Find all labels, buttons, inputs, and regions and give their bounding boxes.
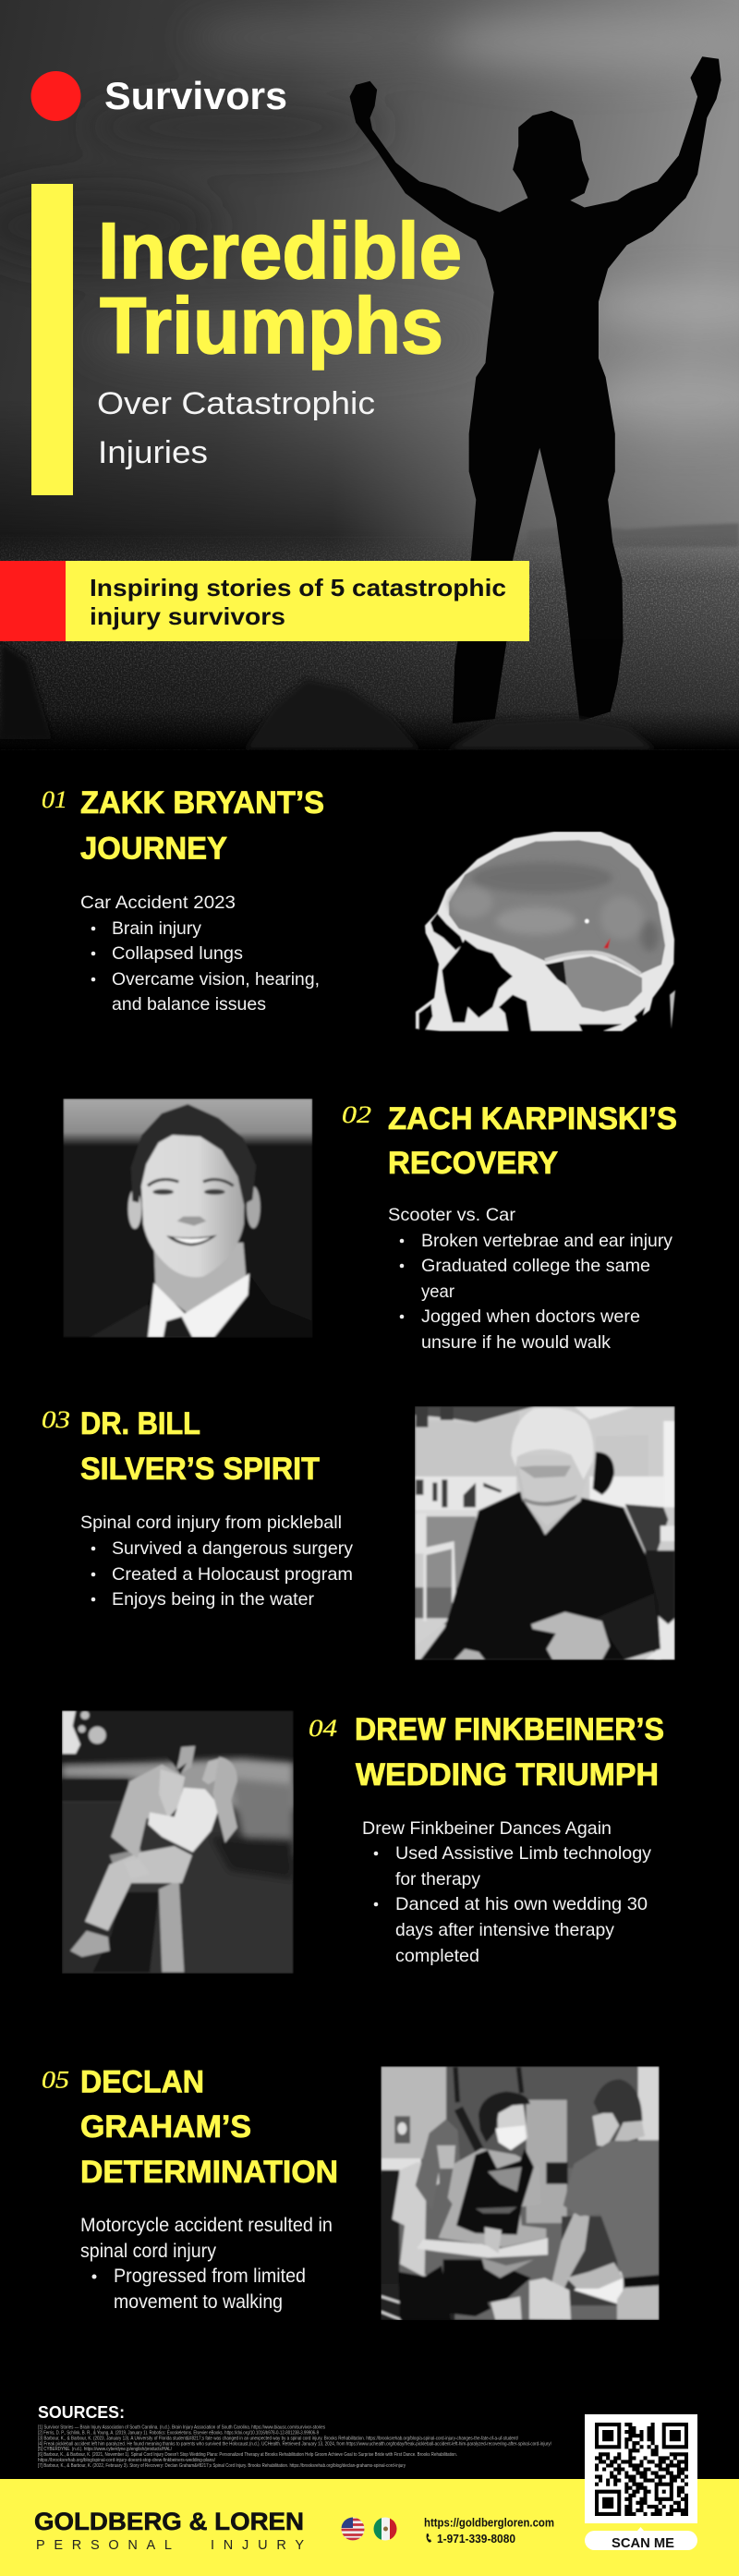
text 04: days after intensive therapy	[395, 1920, 614, 1940]
text 03	[80, 1513, 353, 1610]
intro banner	[0, 561, 529, 641]
number 01: 01	[42, 786, 67, 813]
text 05	[80, 2215, 333, 2313]
text 02: Scooter vs. Car	[388, 1205, 516, 1225]
yellow title bar	[31, 184, 73, 495]
subtitle	[97, 386, 375, 470]
story 03: Dr. Bill Silver	[42, 1406, 675, 1661]
sources: [3] Barbour, K., & Barbour, K. (2023, January 13). A University of Florida student&#8217;s fate was changed in an unexpected way by a spinal cord injury. Brooks Rehabilitation. https://brooksrehab.org/blog/a-spinal-cord-injury-changes-the-fate-of-a-uf-student/	[38, 2436, 519, 2441]
title: Incredible	[98, 207, 462, 296]
photo: walking therapy	[381, 2066, 660, 2320]
photo: man in kitchen	[415, 1406, 675, 1661]
sources: [6] Barbour, K., & Barbour, K. (2021, November 1). Spinal Cord Injury Doesn’t Stop Wedding Plans: Personalized Therapy at Brooks Rehabilitation Help Groom Achieve Goal to Surprise Bride with First Dance. Brooks Rehabilitation.	[38, 2452, 457, 2458]
photo: brain CT scan	[416, 832, 675, 1031]
scan me pill: SCAN ME	[612, 2535, 674, 2551]
footer band	[0, 2479, 739, 2576]
sources: SOURCES:	[38, 2403, 125, 2422]
text 05: Motorcycle accident resulted in	[80, 2215, 333, 2236]
heading 05: DECLAN	[80, 2064, 204, 2099]
intro banner: injury survivors	[90, 602, 285, 630]
text 02: Jogged when doctors were	[421, 1306, 640, 1327]
title: Triumphs	[100, 282, 443, 371]
text 04: completed	[395, 1946, 479, 1966]
logo: Goldberg & Loren: INJURY	[211, 2538, 304, 2553]
heading 01: JOURNEY	[80, 832, 227, 867]
hero photo: silhouette with raised arms	[0, 0, 739, 749]
heading 05: DETERMINATION	[80, 2155, 338, 2190]
text 04: for therapy	[395, 1869, 480, 1889]
text 01: and balance issues	[112, 994, 266, 1015]
heading 02: RECOVERY	[388, 1146, 558, 1181]
sources: [1] Survivor Stories — Brain Injury Association of South Carolina. (n.d.). Brain Injury Association of South Carolina. https://www.biausc.com/survivor-stories	[38, 2424, 325, 2430]
text 02: Broken vertebrae and ear injury	[421, 1231, 672, 1251]
text 05: spinal cord injury	[80, 2241, 216, 2262]
text 02: year	[421, 1282, 454, 1302]
sources: [2] Ferris, D. P., Schlink, B. R., & Young, A. (2019, January 1). Robotics: Exoskeletons. Elsevier eBooks. https://doi.org/10.1016/b978-0-12-801238-3.99906-9	[38, 2430, 319, 2436]
text 03: Created a Holocaust program	[112, 1564, 353, 1585]
text 03: Spinal cord injury from pickleball	[80, 1513, 342, 1533]
hero tag: red dot and Survivors: Survivors	[104, 74, 287, 117]
text 02: unsure if he would walk	[421, 1332, 611, 1353]
heading 01	[80, 785, 324, 867]
contact details: 1-971-339-8080	[437, 2532, 515, 2546]
sources: https://brooksrehab.org/blog/spinal-cord-injury-doesnt-stop-drew-finkbeiners-wedding-plans/	[38, 2458, 216, 2463]
logo: Goldberg & Loren	[34, 2508, 304, 2553]
photo: couple dancing	[62, 1710, 294, 1974]
text 02	[388, 1205, 672, 1353]
text 05: movement to walking	[114, 2291, 283, 2313]
sources: [5] CYBERDYNE. (n.d.). https://www.cyberdyne.jp/english/products/HAL/	[38, 2447, 173, 2452]
heading 03: DR. BILL	[80, 1406, 200, 1441]
heading 02: ZACH KARPINSKI’S	[388, 1101, 677, 1136]
text 02: Graduated college the same	[421, 1256, 650, 1276]
subtitle: Injuries	[98, 435, 208, 470]
contact details: https://goldbergloren.com	[424, 2517, 554, 2530]
number 05: 05	[42, 2066, 69, 2094]
text 04	[362, 1818, 651, 1966]
text 01: Overcame vision, hearing,	[112, 969, 320, 990]
sources: [4] Freak pickleball accident left him paralyzed. He found meaning thanks to parents who survived the Holocaust.(n.d.). UCHealth. Retrieved January 13, 2024, from https://www.uchealth.org/today/freak-pickleball-accident-left-him-paralyzed-recovering-after-spinal-cord-injury/	[38, 2441, 552, 2447]
text 01	[80, 893, 320, 1015]
number 03: 03	[42, 1406, 70, 1433]
heading 04	[355, 1712, 664, 1792]
logo: Goldberg & Loren: GOLDBERG & LOREN	[34, 2508, 304, 2535]
heading 04: WEDDING TRIUMPH	[356, 1757, 659, 1792]
story 02: Zach Karpinski	[63, 1099, 677, 1353]
story 04: Drew Finkbeiner	[62, 1710, 664, 1974]
title	[98, 207, 462, 371]
story 05: Declan Graham	[42, 2064, 660, 2320]
text 04: Danced at his own wedding 30	[395, 1894, 648, 1914]
number 04: 04	[309, 1715, 337, 1742]
text 03: Enjoys being in the water	[112, 1589, 314, 1610]
logo: Goldberg & Loren: PERSONAL	[36, 2538, 172, 2553]
heading 05	[80, 2064, 338, 2190]
photo: smiling portrait	[63, 1099, 312, 1338]
icon: US flag	[341, 2517, 365, 2541]
hero tag: red dot and Survivors	[31, 71, 287, 121]
heading 04: DREW FINKBEINER’S	[355, 1712, 664, 1747]
heading 01: ZAKK BRYANT’S	[80, 785, 324, 820]
text 01: Car Accident 2023	[80, 893, 236, 913]
scan me pill	[585, 2527, 697, 2551]
number 02: 02	[342, 1101, 371, 1128]
heading 05: GRAHAM’S	[80, 2109, 251, 2145]
sources	[38, 2403, 552, 2469]
QR code	[585, 2414, 697, 2523]
text 01: Brain injury	[112, 918, 201, 939]
text 04: Used Assistive Limb technology	[395, 1843, 651, 1864]
text 05: Progressed from limited	[114, 2266, 306, 2287]
sources: [7] Barbour, K., & Barbour, K. (2022, February 3). Story of Recovery: Declan Graham&#8217;s Spinal Cord Injury. Brooks Rehabilitation. https://brooksrehab.org/blog/declan-grahams-spinal-cord-injury	[38, 2463, 406, 2469]
heading 03: SILVER’S SPIRIT	[80, 1452, 320, 1487]
subtitle: Over Catastrophic	[97, 386, 375, 421]
intro banner: Inspiring stories of 5 catastrophic	[90, 574, 506, 601]
heading 03	[80, 1406, 320, 1487]
heading 02	[388, 1101, 677, 1181]
story 01: Zakk Bryant	[42, 785, 675, 1031]
icon: phone	[426, 2533, 431, 2543]
text 04: Drew Finkbeiner Dances Again	[362, 1818, 612, 1839]
text 01: Collapsed lungs	[112, 943, 243, 964]
icon: Mexico flag	[373, 2517, 397, 2541]
contact details	[424, 2517, 554, 2546]
text 03: Survived a dangerous surgery	[112, 1538, 353, 1559]
